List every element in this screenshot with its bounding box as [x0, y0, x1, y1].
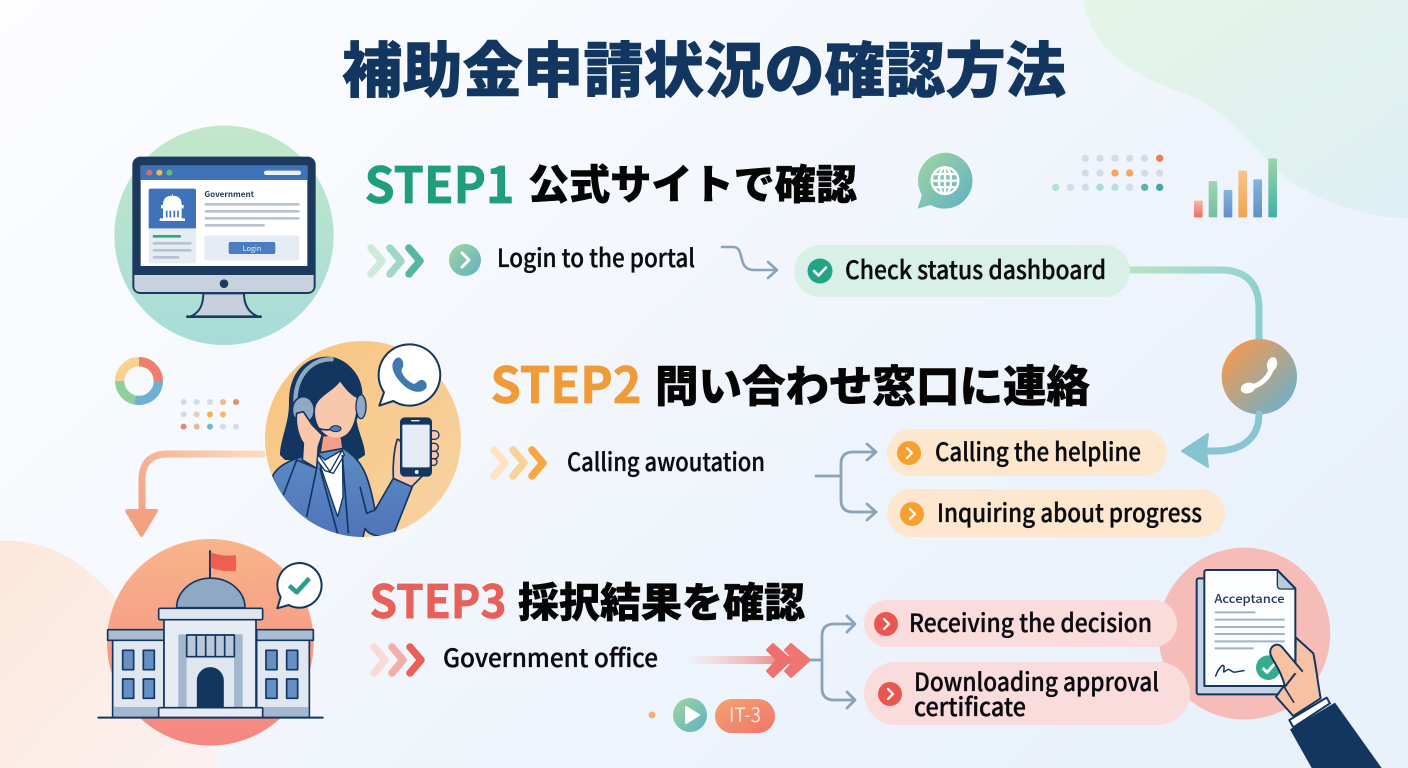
- icon: phone circle: [1222, 339, 1297, 414]
- pill: inquiring about progress: Inquiring about progress: [937, 494, 1202, 530]
- icon: globe speech bubble: [918, 153, 973, 209]
- speech bubble with handset: [379, 344, 440, 406]
- step 1 row: login to the portal: [371, 239, 695, 276]
- icon: chevrons green: [371, 248, 420, 274]
- heading: step 3: 採択結果を確認: [518, 569, 805, 629]
- panel: step 3 illustration, government building: [98, 539, 323, 746]
- heading: step 1: 公式サイトで確認: [528, 151, 857, 211]
- pill: downloading approval certificate: [864, 662, 1190, 725]
- pill: downloading approval certificate: Downloading approval: [914, 663, 1159, 699]
- heading: step 3: STEP3: [370, 566, 506, 632]
- heading: step 1: STEP1: [364, 146, 514, 218]
- arrow: step 3 branch: [810, 616, 855, 708]
- panel: acceptance document in hand: Acceptance: [1214, 590, 1285, 607]
- step 2 row: calling: [494, 443, 765, 479]
- decorative dot grid, left: [181, 399, 239, 430]
- pill: receiving the decision: [864, 600, 1177, 647]
- chart: donut: [120, 362, 158, 400]
- hand: [1270, 637, 1382, 768]
- heading: step 3: [370, 566, 805, 632]
- arrow: login to dashboard: [722, 247, 777, 278]
- tag row: play icon and IT-3 label: [648, 698, 775, 733]
- pill: check status dashboard: [794, 245, 1130, 297]
- step 1 row: login to the portal: Login to the portal: [497, 239, 695, 275]
- title: 補助金申請状況の確認方法: [342, 23, 1066, 110]
- panel: step 2 illustration, operator with headset and smartphone: [265, 341, 461, 543]
- pill: receiving the decision: Receiving the decision: [909, 604, 1152, 640]
- pill: calling the helpline: [887, 429, 1167, 476]
- pill: inquiring about progress: [887, 489, 1225, 537]
- step 2 row: calling: Calling awoutation: [567, 443, 765, 479]
- arrow: dashboard to phone: [1128, 270, 1259, 345]
- panel: step 1 illustration, government site on monitor: Login: [243, 243, 261, 254]
- decorative dot grid, top right: [1052, 155, 1163, 191]
- heading: step 1: [364, 146, 857, 218]
- arrow: phone to helpline: [1182, 414, 1259, 467]
- panel: acceptance document in hand: [1158, 548, 1382, 768]
- heading: step 2: 問い合わせ窓口に連絡: [655, 352, 1090, 415]
- heading: step 2: [490, 346, 1090, 418]
- panel: step 1 illustration, government site on monitor: [114, 126, 334, 345]
- pill: downloading approval certificate: certificate: [914, 688, 1026, 724]
- arrow: red arrow to branch: [685, 644, 810, 677]
- arrow: step 2 to step 3: [125, 454, 265, 537]
- icon: chevrons red: [374, 647, 421, 673]
- icon: bar chart: [1194, 158, 1277, 217]
- icon: chevrons orange: [494, 450, 543, 476]
- tag row: play icon and IT-3 label: IT-3: [729, 699, 761, 728]
- panel: step 1 illustration, government site on monitor: Government: [204, 189, 255, 200]
- speech bubble with check: [277, 563, 322, 608]
- heading: step 2: STEP2: [490, 346, 642, 418]
- arrow: step 2 branch: [816, 444, 876, 520]
- pill: calling the helpline: Calling the helpline: [935, 433, 1141, 469]
- step 3 row: government office: Government office: [443, 639, 658, 675]
- pill: check status dashboard: Check status dashboard: [845, 251, 1106, 287]
